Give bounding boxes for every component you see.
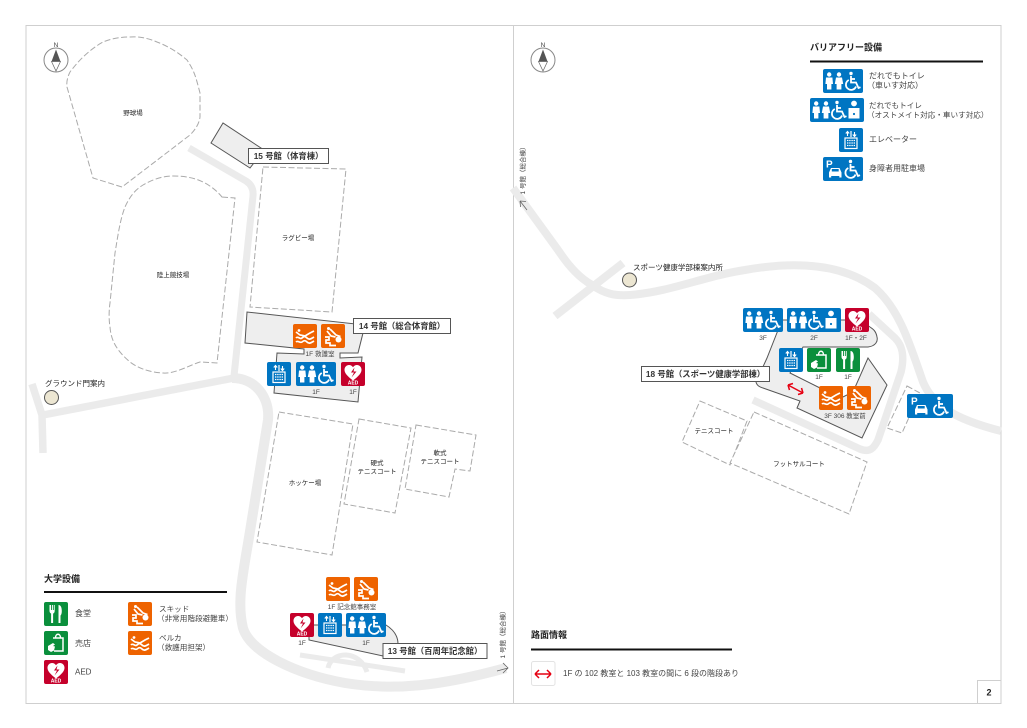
legend text: （非常用階段避難車）: [157, 613, 233, 623]
icon: skid: [847, 386, 871, 410]
floor label: 2F: [810, 335, 818, 342]
icon: AED: [44, 660, 68, 684]
building 13: 13 号館（百周年記念館）: [388, 646, 482, 656]
building 14: 14 号館（総合体育館）: [359, 321, 445, 331]
icon: elevator: [318, 613, 342, 637]
icon: compass: N: [54, 42, 59, 49]
label: futsal court: フットサルコート: [773, 460, 825, 468]
legend heading: 大学設備: [44, 573, 80, 584]
direction to building 1: [518, 144, 527, 210]
icon: accessible toilet: [296, 362, 336, 386]
legend text: ベルカ: [159, 634, 182, 642]
building 15: [211, 123, 328, 168]
icon: skid: [321, 324, 345, 348]
gate guide: ground gate: グラウンド門案内: [45, 378, 105, 388]
legend heading: バリアフリー設備: [810, 42, 882, 52]
floor label: 1F: [312, 389, 320, 396]
legend text: エレベーター: [869, 135, 917, 144]
floor label: 1F: [362, 640, 370, 647]
gate guide: sports department: スポーツ健康学部棟案内所: [633, 262, 723, 272]
label: hard tennis court: テニスコート: [358, 468, 396, 476]
left page map: [32, 37, 508, 687]
icon: shop: [44, 631, 68, 655]
icon: food: [836, 348, 860, 372]
icon: berca: [293, 324, 317, 348]
icon: accessible parking: P: [826, 160, 833, 170]
building 15: 15 号館（体育棟）: [254, 151, 323, 161]
floor label: 3F: [759, 335, 767, 342]
icon: compass: [531, 42, 555, 72]
label: athletics field: 陸上競技場: [157, 270, 190, 279]
icon: compass: [44, 42, 68, 72]
gate guide: sports department: [622, 262, 723, 287]
legend heading: 路面情報: [531, 629, 567, 640]
icon: red double arrow: [532, 662, 555, 686]
legend text: 身障者用駐車場: [869, 163, 925, 173]
legend text: だれでもトイレ: [869, 72, 925, 80]
icon: skid: [354, 577, 378, 601]
icon: shop: [807, 348, 831, 372]
legend text: （オストメイト対応・車いす対応）: [867, 110, 988, 120]
legend text: 売店: [75, 638, 91, 648]
floor label: 1F 救護室: [306, 349, 335, 358]
floor label: 3F 306 教室前: [824, 411, 866, 420]
legend text: だれでもトイレ: [869, 101, 922, 110]
field: hockey: [257, 412, 353, 555]
court: tennis: [682, 401, 747, 465]
floor label: 1F 記念館事務室: [328, 602, 377, 611]
icon: compass: N: [541, 42, 546, 49]
icon: elevator: [839, 128, 863, 152]
icon: AED: AED: [297, 632, 308, 638]
floor label: 1F: [349, 389, 357, 396]
legend text: （車いす対応）: [867, 80, 923, 90]
icon: food: [44, 602, 68, 626]
right page map: [513, 42, 1001, 514]
icon: AED: AED: [51, 678, 62, 684]
legend: barrier free facilities: [810, 42, 988, 181]
floor label: 1F: [844, 374, 852, 381]
direction to building 1: [497, 608, 508, 673]
label: hockey field: ホッケー場: [289, 478, 322, 487]
icon: accessible parking: [907, 394, 953, 418]
icon: ostomate toilet: [810, 98, 864, 122]
label: tennis court: テニスコート: [694, 427, 734, 435]
roads: right campus: [513, 188, 1001, 450]
parking area: [887, 386, 920, 433]
icon: AED: [290, 613, 314, 638]
label: soft tennis court: テニスコート: [420, 458, 460, 466]
icon: AED: [341, 362, 365, 386]
floor label: 1F: [815, 374, 823, 381]
building 18: [642, 308, 887, 438]
icon: accessible toilet: [823, 69, 863, 93]
court: futsal: [730, 412, 867, 514]
icon: AED: AED: [348, 380, 359, 386]
legend text: （救護用担架）: [157, 642, 210, 652]
page number: [978, 680, 1001, 704]
legend text: AED: [75, 668, 92, 676]
building 13: [290, 577, 487, 658]
legend text: 1F の 102 教室と 103 教室の間に 6 段の階段あり: [563, 668, 739, 678]
legend: road information: [531, 629, 739, 686]
court: hard tennis: [344, 419, 411, 513]
floor label: 1F: [298, 640, 306, 647]
icon: berca: [128, 631, 152, 655]
icon: elevator: [267, 362, 291, 386]
building 14: [245, 312, 450, 402]
icon: berca: [326, 577, 350, 601]
icon: AED: AED: [852, 326, 863, 332]
arrow: steps warning: [788, 384, 803, 394]
page number: 2: [986, 688, 992, 698]
icon: accessible parking: P: [911, 396, 918, 408]
label: baseball field: 野球場: [123, 108, 143, 117]
floor label: 1F・2F: [845, 335, 867, 342]
roads: left campus: [32, 148, 506, 687]
field: baseball: [67, 37, 200, 187]
label: hard tennis court: 硬式: [370, 458, 384, 467]
icon: ostomate toilet: [787, 308, 841, 332]
icon: elevator: [779, 348, 803, 372]
icon: accessible parking: [823, 157, 863, 181]
icon: AED: [845, 308, 869, 332]
legend: university facilities: [44, 573, 233, 684]
legend text: 食堂: [75, 608, 91, 618]
icon: accessible toilet: [743, 308, 783, 332]
icon: berca: [819, 386, 843, 410]
label: rugby field: ラグビー場: [282, 233, 315, 242]
legend text: スキッド: [159, 604, 189, 614]
court: soft tennis: [405, 425, 476, 497]
field: rugby: [250, 167, 346, 312]
building 18: 18 号館（スポーツ健康学部棟）: [646, 369, 765, 379]
label: soft tennis court: 軟式: [434, 448, 447, 457]
icon: skid: [128, 602, 152, 626]
direction to building 1: 1 号館（総合棟）: [498, 608, 507, 658]
gate guide: ground gate: [44, 378, 105, 404]
icon: accessible toilet: [346, 613, 386, 637]
direction to building 1: 1 号館（総合棟）: [518, 144, 527, 194]
field: athletics: [109, 176, 235, 373]
